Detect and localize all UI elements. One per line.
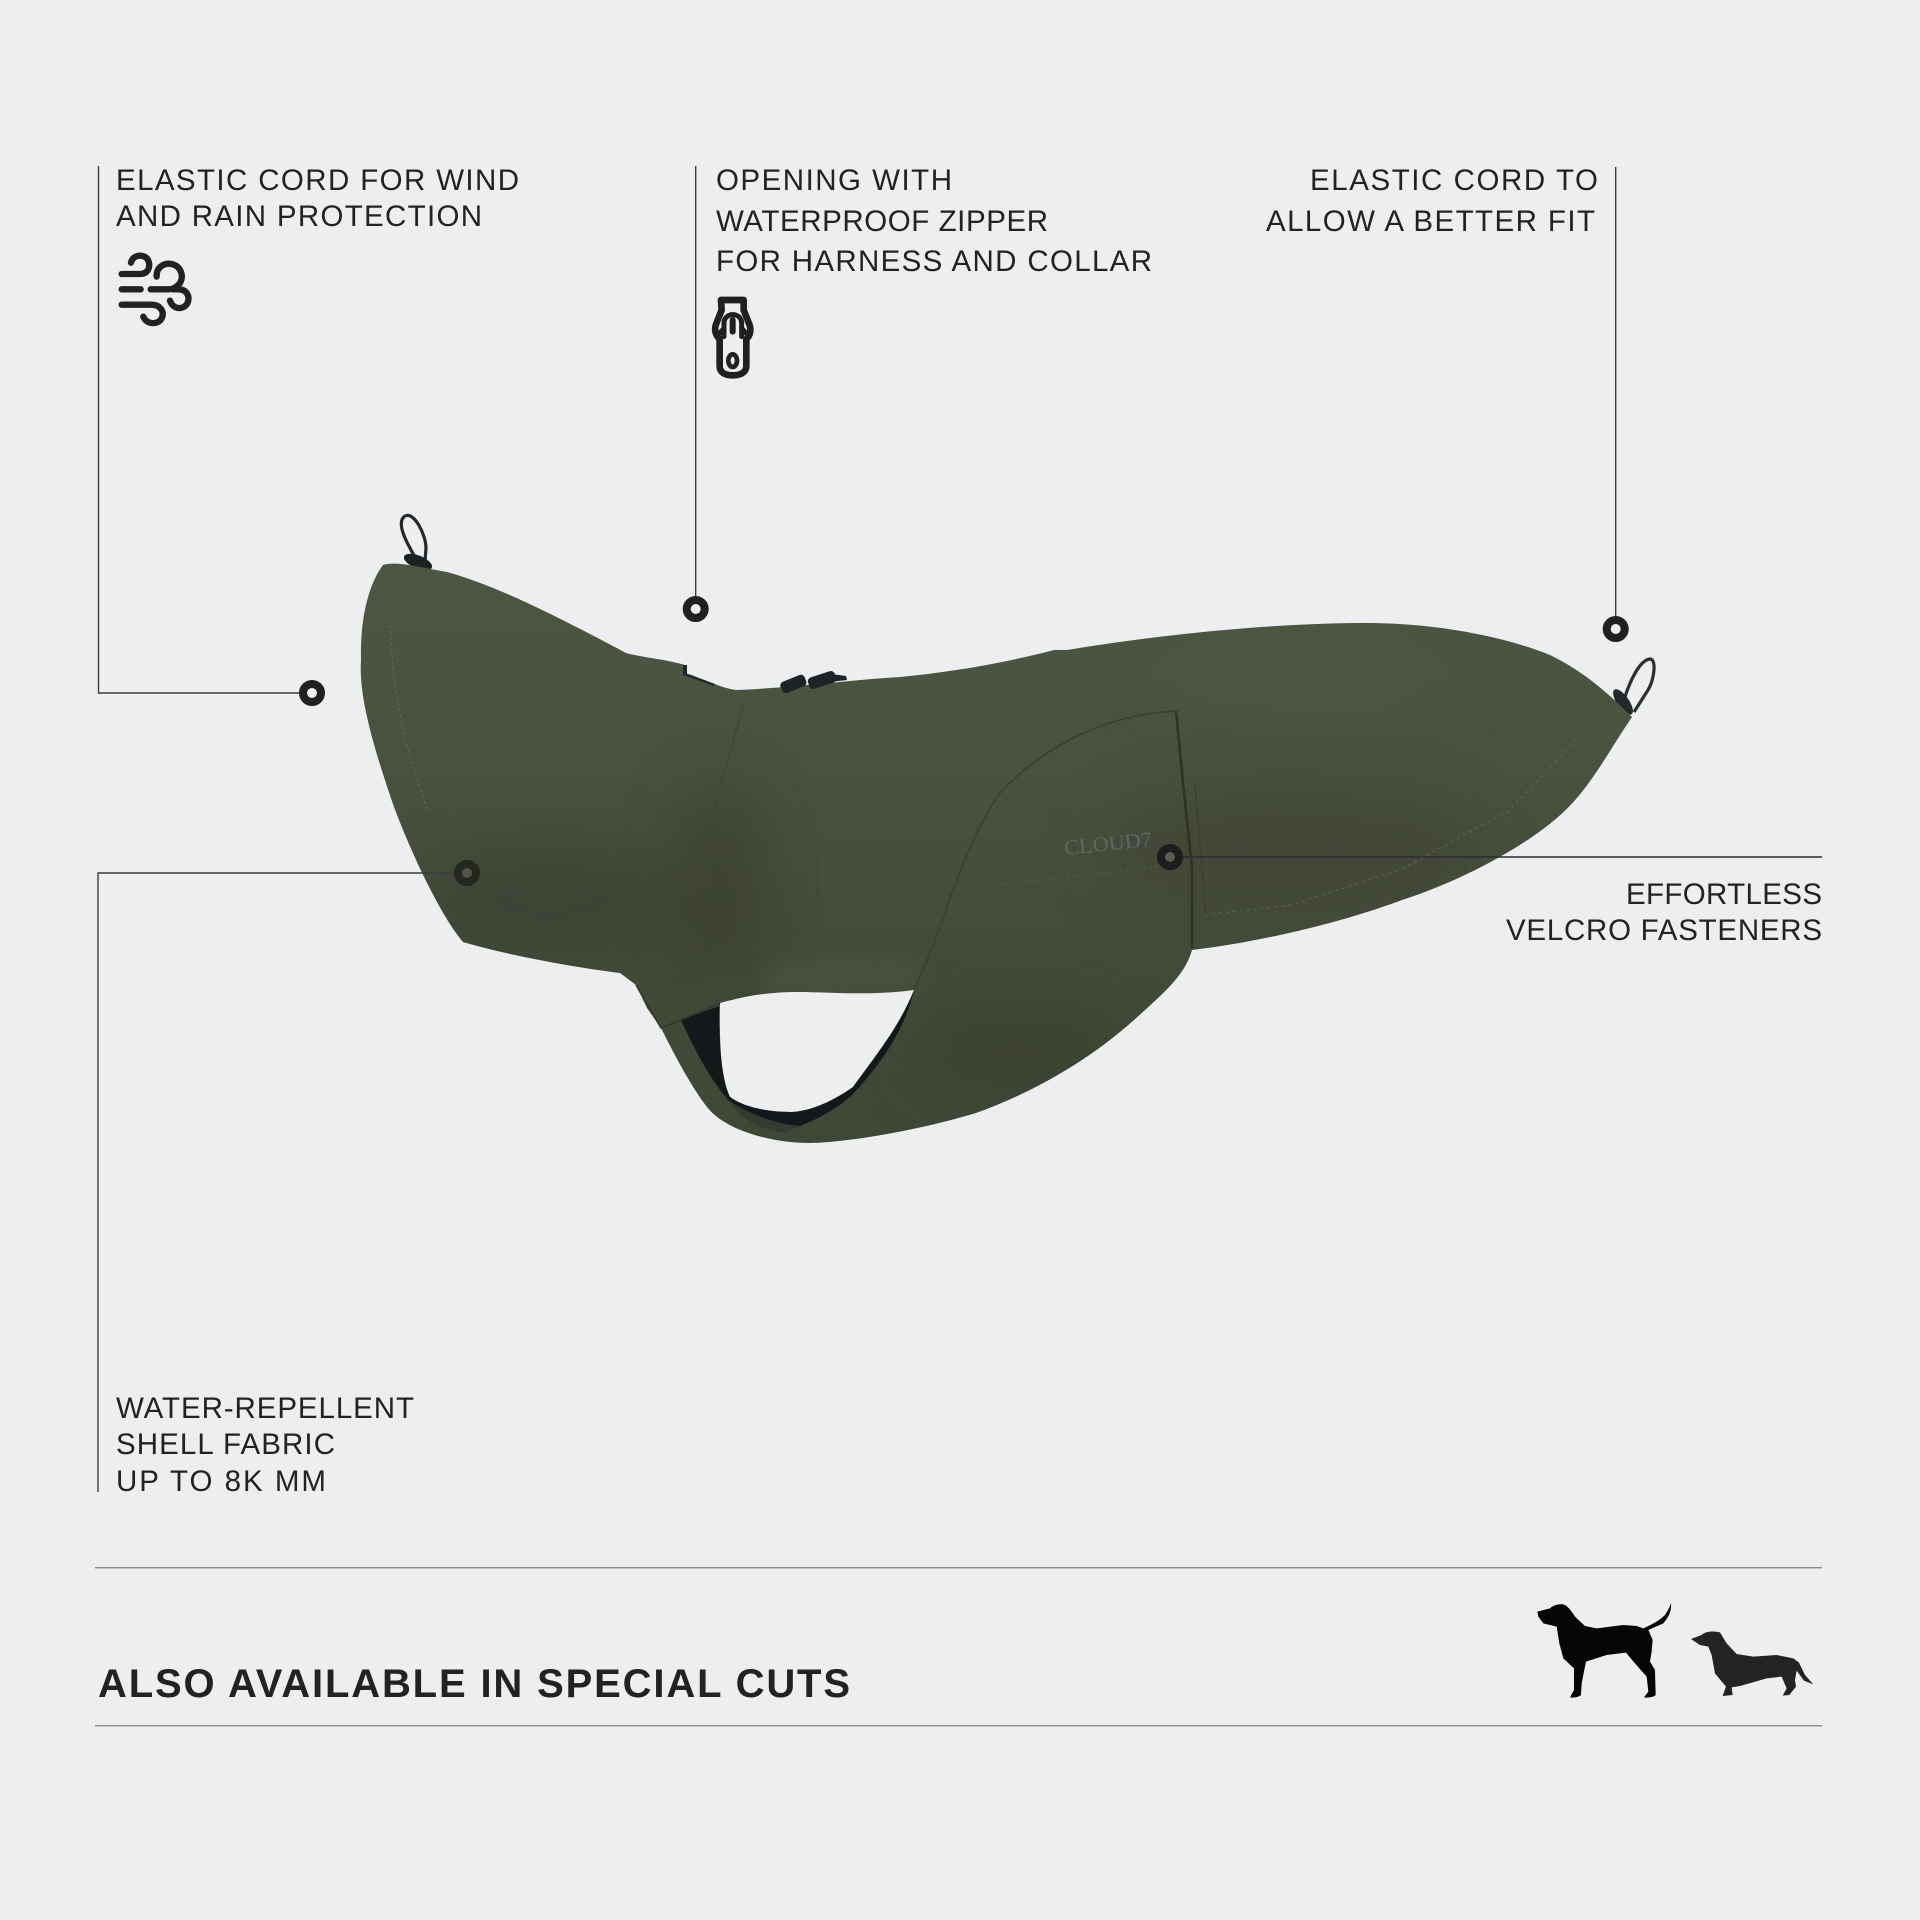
heading: special cuts: ALSO AVAILABLE IN SPECIAL CUTS <box>98 1662 850 1706</box>
product: green dog raincoat <box>361 515 1654 1143</box>
label text: VELCRO FASTENERS <box>1506 914 1822 947</box>
label text: EFFORTLESS <box>1626 878 1822 911</box>
label text: WATER-REPELLENT <box>116 1392 414 1425</box>
callout: water-repellent shell fabric <box>98 864 476 1498</box>
label text <box>116 164 519 233</box>
label text: AND RAIN PROTECTION <box>116 200 482 233</box>
divider bottom <box>95 1725 1822 1726</box>
label text: UP TO 8K MM <box>116 1465 326 1498</box>
icon: wind <box>122 256 188 323</box>
callout: effortless velcro fasteners <box>1161 848 1822 947</box>
cord loop: tail <box>1609 659 1654 718</box>
label text <box>1266 164 1598 238</box>
label text: SHELL FABRIC <box>116 1428 335 1461</box>
label text <box>716 164 1152 278</box>
label text <box>116 1392 414 1498</box>
label text: FOR HARNESS AND COLLAR <box>716 245 1152 278</box>
label text: WATERPROOF ZIPPER <box>716 205 1048 238</box>
icon: labrador silhouette <box>1537 1603 1671 1698</box>
label text: ELASTIC CORD TO <box>1310 164 1598 197</box>
icon: dachshund silhouette <box>1691 1632 1813 1696</box>
coat shading <box>420 650 1480 1095</box>
callout: elastic cord to allow a better fit <box>1266 164 1625 638</box>
zipper pulls <box>779 670 847 694</box>
coat body <box>361 564 1632 1143</box>
flap edge and seams <box>390 625 1580 1028</box>
neck strap tab <box>683 665 715 686</box>
label text: ALLOW A BETTER FIT <box>1266 205 1595 238</box>
brand mark: CLOUD7 <box>1063 827 1153 860</box>
label text: ELASTIC CORD FOR WIND <box>116 164 519 197</box>
inner dark lining <box>681 990 914 1126</box>
callout: opening with waterproof zipper <box>687 164 1152 618</box>
label text <box>1506 878 1822 947</box>
cord loop: neck <box>388 515 434 574</box>
divider top <box>95 1567 1822 1568</box>
callout: elastic cord for wind and rain protection <box>98 164 519 702</box>
label text: OPENING WITH <box>716 164 952 197</box>
icon: zipper <box>715 300 750 375</box>
